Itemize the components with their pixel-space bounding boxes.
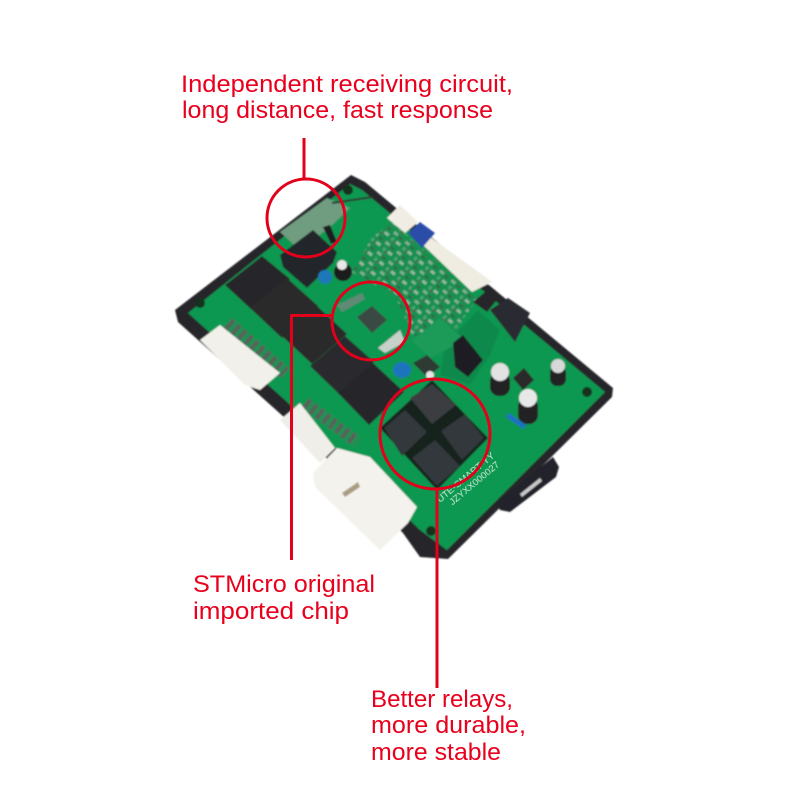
receiving circuit text <box>181 71 513 124</box>
board <box>188 184 605 550</box>
photo: circuit board <box>175 175 613 559</box>
chip text <box>193 571 375 625</box>
mounting holes <box>343 185 353 195</box>
leader line and circle <box>292 282 410 560</box>
case <box>175 175 613 559</box>
left connector <box>200 325 280 390</box>
jumper <box>453 335 483 377</box>
receiving circuit text: Independent receiving circuit, <box>181 71 513 98</box>
relays text: more durable, <box>371 712 526 739</box>
small chip <box>413 355 440 377</box>
four relays <box>410 384 456 424</box>
callout: receiving circuit <box>181 71 513 257</box>
top connectors <box>387 205 418 233</box>
left connector pins <box>228 323 285 373</box>
relays text: more stable <box>371 739 501 766</box>
side connector pins <box>305 403 357 442</box>
leader line and circle <box>380 379 490 688</box>
relay backdrop <box>380 380 488 490</box>
relays text: Better relays, <box>371 686 513 713</box>
main chip <box>357 306 387 333</box>
side connector <box>280 403 335 463</box>
large white connector <box>313 448 417 550</box>
right dark connector <box>473 292 497 312</box>
case tab <box>497 457 559 512</box>
board print: JZYXX000027 <box>447 460 501 507</box>
component area <box>352 222 478 345</box>
board print <box>435 451 503 512</box>
transistor <box>513 368 534 390</box>
board print: UTE-SMART-YY <box>435 451 496 505</box>
chip text: imported chip <box>193 598 349 625</box>
callout: relays <box>371 379 526 766</box>
blue capacitors <box>393 362 411 378</box>
crystal <box>378 330 405 353</box>
callout: chip <box>193 282 410 625</box>
receiving circuit text: long distance, fast response <box>182 97 493 124</box>
relays text <box>371 686 526 766</box>
capacitors <box>318 270 332 284</box>
receiver relay <box>280 230 337 288</box>
chip text: STMicro original <box>193 571 375 598</box>
relay row <box>225 256 290 310</box>
receiver module <box>280 198 350 250</box>
leader line and circle <box>267 138 345 257</box>
